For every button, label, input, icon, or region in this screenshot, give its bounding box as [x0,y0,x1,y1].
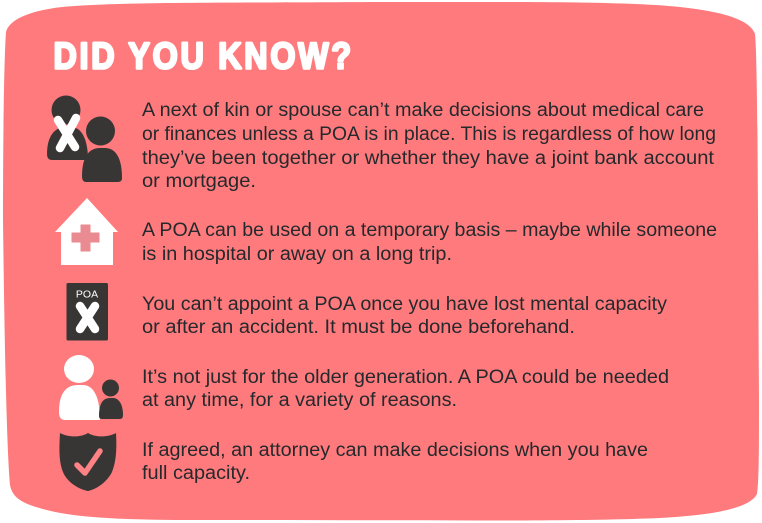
title: DID YOU KNOW? [54,35,351,77]
icon: two people with cross [47,96,122,182]
text: lost capacity [142,293,667,338]
icon: POA document with cross: POA [76,288,98,300]
text: lost capacity: or after an accident. It must be done beforehand. [142,316,575,338]
text: next of kin: they’ve been together or whether they have a joint bank account [142,147,715,169]
text: next of kin: A next of kin or spouse can’t make decisions about medical care [142,99,704,121]
icon: shield with check [59,433,116,491]
text: next of kin: or mortgage. [142,170,256,192]
icon: POA document with cross [66,283,108,340]
text: next of kin: or finances unless a POA is in place. This is regardless of how long [142,123,716,145]
text: full capacity [142,439,648,484]
text: any generation: at any time, for a variety of reasons. [142,389,457,411]
text: full capacity: If agreed, an attorney can make decisions when you have [142,439,648,461]
text: temporary basis: A POA can be used on a temporary basis – maybe while someone [142,219,717,241]
icon: house with medical cross [55,198,118,265]
text: full capacity: full capacity. [142,462,250,484]
text: lost capacity: You can’t appoint a POA once you have lost mental capacity [142,293,667,315]
text: temporary basis [142,219,717,265]
icon: adult and child [59,355,123,420]
text: next of kin [142,99,716,192]
text: any generation: It’s not just for the older generation. A POA could be needed [142,366,669,388]
text: any generation [142,366,669,411]
text: temporary basis: is in hospital or away on a long trip. [142,243,452,265]
